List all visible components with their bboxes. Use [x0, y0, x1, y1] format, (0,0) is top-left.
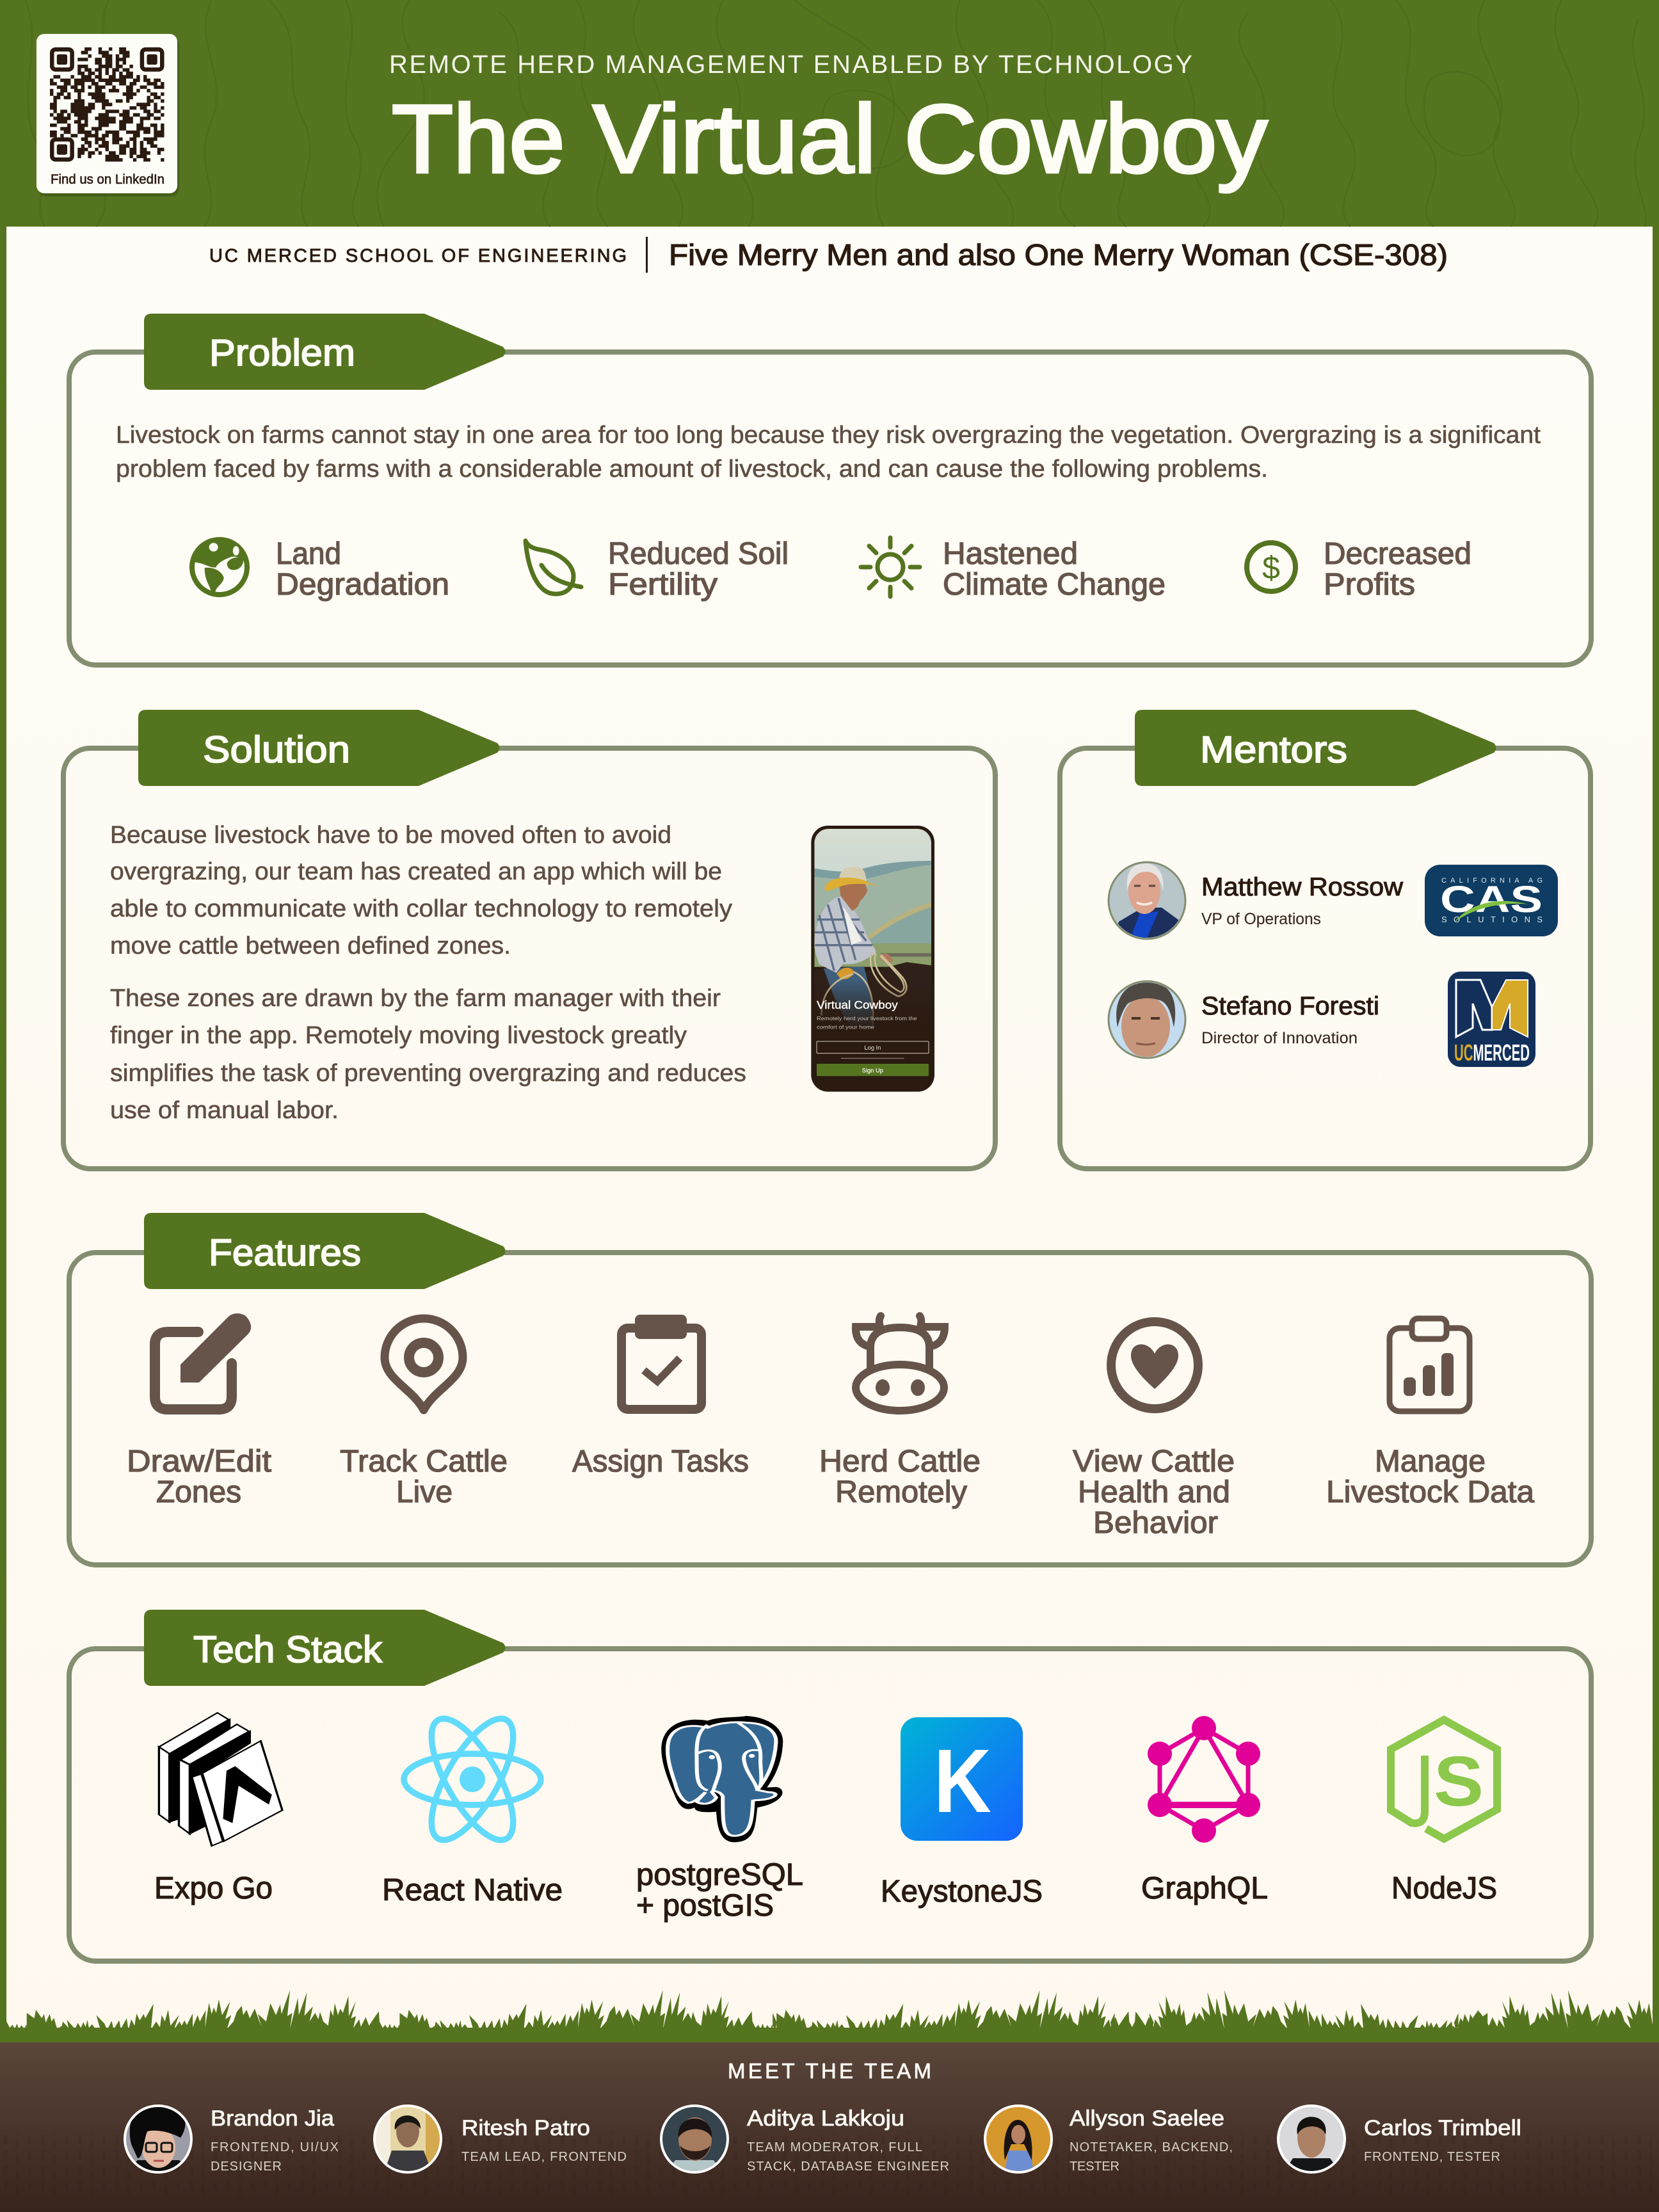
panel: tech stack [69, 1610, 1591, 1961]
log in button: Log In [864, 1045, 881, 1051]
member: allyson saelee: TESTER [1070, 2160, 1119, 2174]
mentor: matthew rossow: VP of Operations [1201, 910, 1321, 928]
solution description: move cattle between defined zones. [110, 933, 511, 959]
subheader [209, 237, 1448, 273]
icon: expo [159, 1713, 282, 1846]
solution description: finger in the app. Remotely moving livestock greatly [110, 1022, 687, 1049]
icon: leaf [525, 541, 581, 594]
icon: clipboard chart [1390, 1318, 1470, 1411]
heading: solution [138, 710, 499, 786]
member: brandon jia [125, 2104, 339, 2174]
feature: manage livestock data [1326, 1318, 1534, 1509]
feature: view cattle health [1073, 1322, 1235, 1540]
solution description: Because livestock have to be moved often to avoid [110, 822, 671, 849]
mentor: stefano foresti [1109, 972, 1535, 1067]
heading: problem: Problem [209, 332, 355, 374]
item: hastened climate change [861, 537, 1166, 602]
member: aditya lakkoju: STACK, DATABASE ENGINEER [747, 2160, 949, 2174]
tech: react native: React Native [382, 1873, 563, 1907]
feature: draw edit zones [127, 1313, 271, 1509]
icon: react [404, 1707, 541, 1852]
member: carlos trimbell: FRONTEND, TESTER [1364, 2150, 1500, 2164]
member: ritesh patro [374, 2106, 627, 2176]
app title: Virtual Cowboy [817, 998, 898, 1011]
member: brandon jia: Brandon Jia [211, 2106, 334, 2131]
logo: uc merced: UCMERCED [1454, 1039, 1530, 1066]
icon: sun [861, 538, 920, 597]
tech: expo go [154, 1713, 282, 1905]
icon: cow [856, 1316, 945, 1411]
qr caption: Find us on LinkedIn [51, 172, 164, 187]
mentor: matthew rossow [1109, 862, 1558, 941]
tech: postgresql postgis: postgreSQL [636, 1858, 803, 1892]
qr card [36, 34, 179, 196]
phone mockup: Remotely herd your livestock from the [817, 1015, 917, 1022]
logo: cas solutions: SOLUTIONS [1441, 915, 1543, 924]
problem description: problem faced by farms with a considerable amount of livestock, and can cause the following problems. [116, 456, 1268, 483]
heading: features: Features [209, 1232, 361, 1274]
feature: herd cattle remotely: Remotely [835, 1475, 967, 1509]
item: decreased profits: Profits [1324, 568, 1415, 602]
panel: solution [63, 710, 995, 1169]
icon: dollar [1247, 543, 1295, 591]
member: carlos trimbell [1278, 2106, 1521, 2173]
feature: draw edit zones: Draw/Edit [127, 1445, 271, 1479]
icon: graphql [1148, 1716, 1260, 1843]
photo: matthew rossow [1109, 862, 1185, 941]
heading: tech stack: Tech Stack [193, 1629, 383, 1671]
feature: herd cattle remotely: Herd Cattle [819, 1445, 981, 1479]
tech: nodejs [1391, 1720, 1497, 1905]
item: reduced soil fertility: Fertility [608, 568, 717, 602]
member: allyson saelee: NOTETAKER, BACKEND, [1070, 2140, 1233, 2154]
problem description: Livestock on farms cannot stay in one area for too long because they risk overgrazing the vegetation. Overgrazing is a significant [116, 422, 1541, 449]
solution description: simplifies the task of preventing overgrazing and reduces [110, 1060, 746, 1087]
member: aditya lakkoju: TEAM MODERATOR, FULL [747, 2140, 922, 2154]
team name: Five Merry Men and also One Merry Woman (CSE-308) [669, 238, 1448, 271]
icon: postgres elephant [661, 1716, 783, 1842]
feature: view cattle health: View Cattle [1073, 1445, 1235, 1479]
item: land degradation [192, 537, 449, 602]
logo: cas solutions: CAS [1440, 879, 1543, 920]
feature: view cattle health: Health and [1078, 1475, 1230, 1509]
icon: clipboard check [621, 1315, 701, 1409]
icon: nodejs [1391, 1720, 1497, 1839]
member: allyson saelee: Allyson Saelee [1070, 2106, 1224, 2131]
icon: heart [1111, 1322, 1198, 1409]
item: land degradation: Land [276, 537, 341, 571]
heading: problem [144, 314, 506, 390]
footer: team [0, 2042, 1659, 2212]
heading: solution: Solution [203, 729, 350, 771]
solution description: able to communicate with collar technology to remotely [110, 895, 732, 922]
phone mockup [811, 826, 934, 1093]
member: ritesh patro: TEAM LEAD, FRONTEND [461, 2150, 627, 2164]
qr code [50, 49, 164, 160]
icon: nodejs: S [1434, 1742, 1484, 1821]
item: hastened climate change: Climate Change [943, 568, 1166, 602]
mentor: stefano foresti: Stefano Foresti [1201, 992, 1379, 1020]
icon: globe [192, 538, 247, 595]
item: reduced soil fertility: Reduced Soil [608, 537, 789, 571]
icon: edit [155, 1313, 251, 1409]
item: decreased profits: Decreased [1324, 537, 1471, 571]
photo: aditya lakkoju [661, 2106, 728, 2173]
feature: track cattle live [340, 1318, 508, 1509]
member: carlos trimbell: Carlos Trimbell [1364, 2116, 1521, 2140]
solution description: use of manual labor. [110, 1097, 339, 1124]
solution description [110, 822, 746, 1124]
header kicker: REMOTE HERD MANAGEMENT ENABLED BY TECHNOLOGY [389, 51, 1192, 79]
heading: features [144, 1213, 506, 1289]
footer heading: MEET THE TEAM [728, 2059, 931, 2083]
problem description [116, 422, 1541, 483]
feature: assign tasks: Assign Tasks [572, 1445, 749, 1479]
feature: draw edit zones: Zones [156, 1475, 241, 1509]
heading: mentors [1135, 710, 1496, 786]
logo: uc merced [1448, 972, 1535, 1067]
panel: mentors [1060, 710, 1591, 1169]
photo: stefano foresti [1109, 981, 1185, 1058]
logo: cas solutions: CALIFORNIA AG [1441, 877, 1543, 885]
item: land degradation: Degradation [276, 568, 449, 602]
feature: track cattle live: Track Cattle [340, 1445, 508, 1479]
panel: features [69, 1213, 1591, 1565]
tech: expo go: Expo Go [154, 1871, 273, 1905]
feature: view cattle health: Behavior [1093, 1506, 1218, 1540]
logo: cas solutions [1425, 865, 1558, 936]
solution description: overgrazing, our team has created an app which will be [110, 858, 722, 885]
icon: keystone: K [934, 1730, 991, 1831]
tech: postgresql postgis [636, 1716, 803, 1923]
log in button [817, 1041, 929, 1054]
member: brandon jia: FRONTEND, UI/UX [211, 2140, 339, 2154]
item: reduced soil fertility [525, 537, 789, 602]
sign up button [817, 1064, 929, 1076]
feature: manage livestock data: Livestock Data [1326, 1475, 1534, 1509]
tech: keystonejs: KeystoneJS [881, 1875, 1043, 1909]
heading: mentors: Mentors [1200, 729, 1347, 771]
sign up button: Sign Up [862, 1067, 883, 1073]
mentor: matthew rossow: Matthew Rossow [1201, 873, 1403, 901]
tech: keystonejs [881, 1717, 1043, 1909]
icon: location pin [385, 1318, 463, 1410]
feature: manage livestock data: Manage [1375, 1445, 1486, 1479]
panel: problem [69, 314, 1591, 665]
member: allyson saelee [985, 2106, 1233, 2174]
title: The Virtual Cowboy [392, 84, 1268, 193]
tech: react native [382, 1707, 563, 1907]
member: aditya lakkoju: Aditya Lakkoju [747, 2106, 904, 2131]
school name: UC MERCED SCHOOL OF ENGINEERING [209, 246, 627, 266]
photo: brandon jia [125, 2104, 192, 2173]
feature: assign tasks [572, 1315, 749, 1479]
member: brandon jia: DESIGNER [211, 2160, 282, 2174]
tech: nodejs: NodeJS [1391, 1871, 1497, 1905]
icon: keystone [901, 1717, 1023, 1841]
icon: dollar: $ [1262, 550, 1280, 586]
feature: herd cattle remotely [819, 1316, 981, 1509]
mentor: stefano foresti: Director of Innovation [1201, 1029, 1358, 1047]
tech: postgresql postgis: + postGIS [636, 1889, 774, 1923]
heading: tech stack [144, 1610, 506, 1686]
tech: graphql [1141, 1716, 1268, 1905]
photo: carlos trimbell [1278, 2106, 1345, 2173]
solution description: These zones are drawn by the farm manager with their [110, 985, 721, 1012]
photo: ritesh patro [374, 2106, 442, 2176]
item: hastened climate change: Hastened [943, 537, 1078, 571]
member: aditya lakkoju [661, 2106, 949, 2174]
grass [0, 1990, 1659, 2043]
phone mockup: comfort of your home [817, 1023, 874, 1030]
photo: allyson saelee [985, 2106, 1052, 2173]
feature: track cattle live: Live [396, 1475, 453, 1509]
header band [0, 0, 1659, 227]
item: decreased profits [1247, 537, 1471, 602]
tech: graphql: GraphQL [1141, 1871, 1268, 1905]
member: ritesh patro: Ritesh Patro [461, 2116, 590, 2140]
